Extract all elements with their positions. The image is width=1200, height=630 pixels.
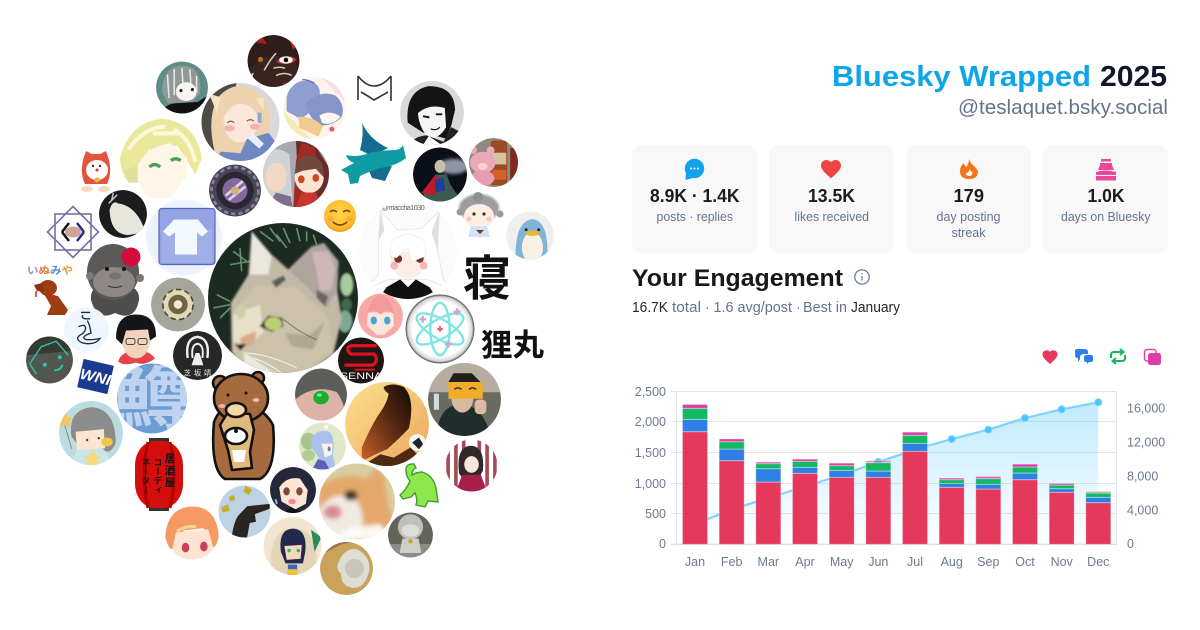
icon: smiling emoji <box>324 200 356 232</box>
icon: heart <box>821 160 841 178</box>
avatar: white dove on black <box>99 190 147 238</box>
avatar: orange haired boy <box>165 506 219 560</box>
month labels: Jun <box>868 555 888 569</box>
avatar: green robot smile <box>26 336 73 384</box>
left axis labels: 2,000 <box>635 415 666 429</box>
avatar: hooded person <box>264 517 322 575</box>
avatar cloud <box>26 34 554 595</box>
avatar: white fox girl: @maccha1030 <box>382 203 425 212</box>
logo: WNI: WNI <box>78 366 113 389</box>
icon: brain in diamond <box>48 207 98 257</box>
avatar: white t-shirt on blue <box>146 200 222 276</box>
panel: posts and replies: 8.9K · 1.4K <box>650 185 740 206</box>
avatar: Senna logo <box>338 338 384 384</box>
month labels: Jan <box>685 555 705 569</box>
heading: your engagement: Your Engagement <box>632 265 843 292</box>
panel: likes received <box>769 145 894 253</box>
bar: Jul <box>902 432 928 544</box>
month labels: Oct <box>1015 555 1035 569</box>
avatar: white fox girl <box>371 204 446 299</box>
bar: Oct <box>1012 464 1038 544</box>
stacked bars <box>682 404 1111 544</box>
engagement summary: 16.7K <box>632 300 668 316</box>
icon: manta ray <box>341 123 406 184</box>
month labels: May <box>830 555 854 569</box>
cumulative line <box>695 402 1098 524</box>
panel: day posting streak <box>906 145 1031 253</box>
line points <box>875 399 1102 466</box>
icon: MU logo <box>358 76 391 101</box>
month labels: Jul <box>907 555 923 569</box>
avatar: pixel atom badge <box>406 294 474 364</box>
right axis labels: 0 <box>1127 537 1134 551</box>
icon: red izakaya lantern: コーディ <box>152 458 164 494</box>
month labels: Sep <box>977 555 999 569</box>
avatar: blonde green-eyed woman <box>120 117 202 199</box>
avatar: tree with yellow leaves <box>218 486 270 538</box>
engagement summary: January <box>851 300 901 316</box>
bar: Apr <box>792 459 818 544</box>
left axis labels: 1,500 <box>635 446 666 460</box>
area under cumulative line <box>695 402 1098 544</box>
icon: legend replies <box>1075 349 1093 364</box>
month labels <box>685 555 1109 569</box>
avatar: blonde girl closed eyes <box>202 83 280 161</box>
avatar: person with orange paper mask <box>428 363 501 436</box>
engagement summary: total <box>672 300 701 316</box>
engagement summary: · <box>705 300 710 316</box>
panel: posts and replies: posts · replies <box>656 210 733 224</box>
avatar: pink haired anime girl <box>358 294 403 338</box>
avatar: silver flower crest <box>151 278 205 332</box>
engagement summary: · <box>796 300 801 316</box>
avatar: penguin <box>506 212 554 263</box>
icon: info <box>855 270 869 284</box>
avatar: dark seal portrait <box>173 331 222 380</box>
panel: posts and replies <box>632 145 757 253</box>
avatar: pink bear and bottles <box>469 138 520 187</box>
avatar: gray doraemon statue <box>388 512 433 558</box>
icon: green elephant <box>400 464 438 507</box>
handle: @teslaquet.bsky.social <box>958 96 1168 119</box>
right axis labels <box>1127 402 1165 551</box>
avatar: person in smoke <box>413 148 469 202</box>
icon: legend quotes <box>1144 350 1161 365</box>
right axis labels: 8,000 <box>1127 470 1158 484</box>
avatar: gray-haired girl on teal <box>156 62 208 116</box>
bar: Mar <box>756 462 781 544</box>
avatar: blue haired anime on green <box>299 422 346 470</box>
month labels: Aug <box>941 555 963 569</box>
bar: Nov <box>1049 484 1074 544</box>
avatar: crow silhouette on orange <box>345 382 429 466</box>
logo: inumiya dog <box>27 262 73 315</box>
engagement summary: 1.6 avg/post <box>714 300 792 316</box>
grid lines <box>671 391 1117 544</box>
avatar: blue kanji masu <box>117 364 187 434</box>
bar: Aug <box>939 478 964 544</box>
left axis labels: 2,500 <box>635 385 666 399</box>
bar: Sep <box>976 476 1001 544</box>
avatar: black-haired manga man <box>400 81 464 145</box>
avatar: snake drawing <box>64 307 109 352</box>
avatar: blue kanji masu: 鱒 <box>111 339 193 446</box>
avatar: dark haired anime girl <box>270 467 316 513</box>
chart legend <box>1042 349 1161 365</box>
avatar: gorilla with red flower <box>86 244 144 316</box>
avatar: orange and white cat blur <box>319 464 395 540</box>
panel: day posting streak: day posting <box>936 210 1000 224</box>
avatar: silver and brown haired duo <box>263 141 329 207</box>
avatar: purple beyblade <box>209 164 261 216</box>
logo text: tanuki maru: 狸丸 <box>481 320 544 365</box>
icon: red izakaya lantern: 居酒屋 <box>162 453 178 489</box>
icon: flame <box>960 159 978 179</box>
icon: chat bubble <box>685 159 704 180</box>
title: Bluesky Wrapped <box>832 61 1091 93</box>
panel: likes received: 13.5K <box>808 185 856 206</box>
panel: days on Bluesky: days on Bluesky <box>1061 210 1151 224</box>
avatar: grandma <box>456 192 504 237</box>
avatar: dark seal portrait: 芝坂靖 <box>184 368 212 379</box>
title: 2025 <box>1100 61 1167 93</box>
month labels: Apr <box>795 555 815 569</box>
right axis labels: 16,000 <box>1127 402 1165 416</box>
avatar: sand cookie with stencil <box>320 542 373 595</box>
panel: day posting streak: streak <box>952 226 986 240</box>
panel: likes received: likes received <box>794 210 869 224</box>
left axis labels: 0 <box>659 537 666 551</box>
icon: legend likes <box>1042 350 1058 364</box>
panel: days on Bluesky <box>1043 145 1168 253</box>
right axis labels: 12,000 <box>1127 436 1165 450</box>
panel: day posting streak: 179 <box>954 185 984 206</box>
avatar: girl in red sweater on stripes <box>446 440 498 492</box>
bar: Jan <box>682 404 708 544</box>
month labels: Nov <box>1051 555 1074 569</box>
right axis labels: 4,000 <box>1127 504 1158 518</box>
bar and line chart <box>635 385 1165 569</box>
icon: cake <box>1096 159 1116 180</box>
avatar: Senna logo: SENNA <box>340 371 382 381</box>
icon: red izakaya lantern: ネーター <box>140 458 152 494</box>
avatar: blue dogs <box>284 77 346 139</box>
avatar: red hooded doraemon <box>81 151 110 192</box>
engagement summary: Best in <box>803 300 847 316</box>
logo: WNI <box>77 359 115 394</box>
month labels: Feb <box>721 555 743 569</box>
panel: days on Bluesky: 1.0K <box>1088 185 1125 206</box>
bar: Jun <box>866 460 891 544</box>
avatar: dark fox <box>248 34 301 88</box>
bar: May <box>829 463 854 544</box>
avatar: brown bear holding dog <box>213 372 274 479</box>
bar: Dec <box>1086 492 1111 544</box>
avatar: girl with gray bob and star <box>56 401 123 465</box>
left axis labels: 500 <box>645 507 666 521</box>
avatar: tabby cat main photo <box>208 223 358 373</box>
month labels: Dec <box>1087 555 1109 569</box>
logo text: stylised kanji: 寝 <box>463 239 511 309</box>
avatar: green dot on hand <box>295 368 347 420</box>
icon: legend reposts <box>1111 349 1125 364</box>
logo: inumiya dog: いぬみや <box>27 262 73 277</box>
avatar: man with glasses <box>116 314 156 364</box>
bar: Feb <box>719 439 744 544</box>
left axis labels <box>635 385 666 551</box>
icon: red izakaya lantern <box>135 438 183 511</box>
left axis labels: 1,000 <box>635 477 666 491</box>
month labels: Mar <box>758 555 779 569</box>
